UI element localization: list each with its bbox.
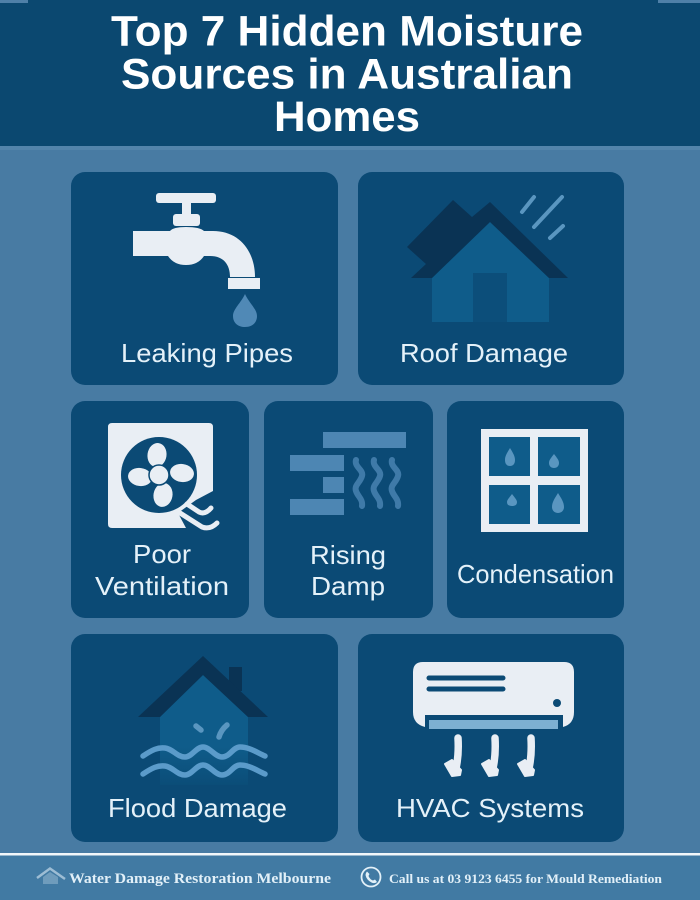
label: HVAC Systems bbox=[396, 793, 584, 823]
panel: condensation bbox=[447, 401, 624, 618]
icon: air conditioner bbox=[413, 662, 574, 776]
phone call to action: Call us at 03 9123 6455 for Mould Remediation bbox=[389, 872, 662, 886]
title bbox=[111, 8, 583, 141]
icon: extractor fan bbox=[108, 423, 217, 528]
panel: poor ventilation bbox=[71, 401, 249, 618]
label: Poor bbox=[133, 539, 191, 569]
icon: window with droplets bbox=[481, 429, 588, 532]
label bbox=[310, 540, 386, 601]
title: Homes bbox=[274, 93, 420, 141]
icon: flooded house bbox=[138, 656, 268, 785]
title: Top 7 Hidden Moisture bbox=[111, 8, 583, 56]
icon: damaged house bbox=[407, 197, 568, 322]
icon: dripping tap bbox=[133, 193, 260, 327]
icon: phone bbox=[362, 868, 380, 886]
icon: damp wall bbox=[290, 432, 406, 515]
label: Rising bbox=[310, 540, 386, 570]
title: Sources in Australian bbox=[121, 50, 573, 98]
footer band bbox=[0, 853, 700, 900]
label: Roof Damage bbox=[400, 338, 568, 368]
panel: hvac systems bbox=[358, 634, 624, 842]
header band bbox=[0, 0, 700, 150]
panel: leaking pipes bbox=[71, 172, 338, 385]
label: Leaking Pipes bbox=[121, 338, 293, 368]
company name: Water Damage Restoration Melbourne bbox=[69, 871, 332, 887]
panel: rising damp bbox=[264, 401, 433, 618]
panel: flood damage bbox=[71, 634, 338, 842]
panel: roof damage bbox=[358, 172, 624, 385]
label: Flood Damage bbox=[108, 793, 287, 823]
label: Condensation bbox=[457, 559, 614, 589]
label bbox=[95, 539, 229, 601]
label: Damp bbox=[311, 571, 385, 601]
label: Ventilation bbox=[95, 571, 229, 601]
icon: water drop bbox=[233, 294, 257, 327]
icon: house logo bbox=[37, 868, 65, 884]
